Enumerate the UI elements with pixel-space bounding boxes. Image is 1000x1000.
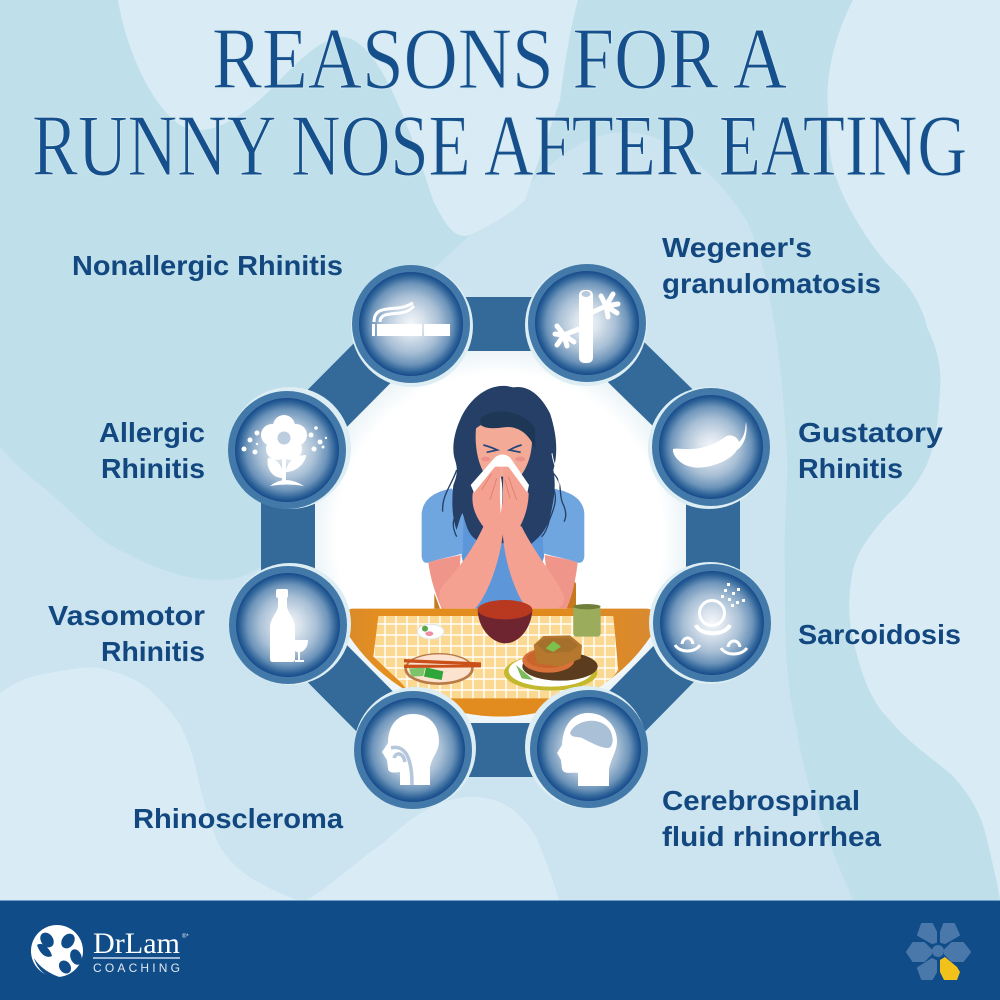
icon circle: flower pollen [228,387,351,509]
title [32,11,967,195]
icon circle: wine bottle and glass [229,563,351,685]
logo: DrLam Coaching [31,925,189,978]
soup bowl [478,600,532,643]
icon circle: chili pepper [648,387,770,509]
title: REASONS FOR A [212,11,787,108]
logo: DrLam Coaching: COACHING [93,961,180,975]
icon: granulomas [675,583,747,654]
label: Vasomotor Rhinitis [48,600,205,667]
icon circle: lung granulomas [649,562,771,684]
label: Gustatory Rhinitis: Gustatory [798,417,943,448]
label: Allergic Rhinitis [99,417,205,484]
icon: cigarette [372,303,450,336]
cheeks [481,457,525,461]
face [476,420,532,477]
main plate [504,635,598,691]
label: Cerebrospinal fluid rhinorrhea: fluid rhinorrhea [662,821,881,852]
icon: throat [382,714,439,785]
icon circle: head with throat [354,687,476,809]
label: Gustatory Rhinitis: Rhinitis [798,453,903,484]
label: Vasomotor Rhinitis: Vasomotor [48,600,205,631]
chair [434,580,576,609]
logo: flower mark [907,924,970,980]
label: Nonallergic Rhinitis: Nonallergic Rhinitis [72,250,343,281]
label: Cerebrospinal fluid rhinorrhea: Cerebrospinal [662,785,860,816]
small dish [417,624,444,639]
hands [472,465,529,527]
label: Sarcoidosis: Sarcoidosis [798,619,961,650]
icon: chili [673,422,747,468]
table [346,609,655,717]
footer band [0,900,1000,1000]
upper arms [428,555,578,609]
icon: airway [555,290,618,363]
label: Cerebrospinal fluid rhinorrhea [662,785,881,852]
icon circle: cigarette [351,265,473,387]
logo: DrLam Coaching: ®* [182,933,189,940]
icon circle: airway with snowflakes [525,264,647,386]
left plate with chopsticks [404,653,481,685]
arms [439,517,564,609]
central illustration: sneezing woman at table [346,386,655,717]
shirt [422,488,584,609]
label: Vasomotor Rhinitis: Rhinitis [101,636,205,667]
fingers [500,476,502,513]
logo: DrLam Coaching: DrLam [93,927,180,960]
icon circle: head with brain [525,686,648,808]
label: Wegener's granulomatosis [662,232,881,299]
eyes [483,445,522,452]
hair [443,386,566,545]
icon: brain head [557,713,617,786]
label: Wegener's granulomatosis: granulomatosis [662,268,881,299]
octagon ring [288,324,713,750]
label: Rhinoscleroma: Rhinoscleroma [133,803,343,834]
label: Wegener's granulomatosis: Wegener's [662,232,812,263]
label: Gustatory Rhinitis [798,417,943,484]
icon: bottle [270,589,308,662]
icon: flower [242,415,327,486]
label: Allergic Rhinitis: Allergic [99,417,205,448]
green cup [573,604,601,637]
tissue [471,454,529,493]
fringe [481,412,535,450]
label: Allergic Rhinitis: Rhinitis [101,453,205,484]
placemat [373,616,618,698]
